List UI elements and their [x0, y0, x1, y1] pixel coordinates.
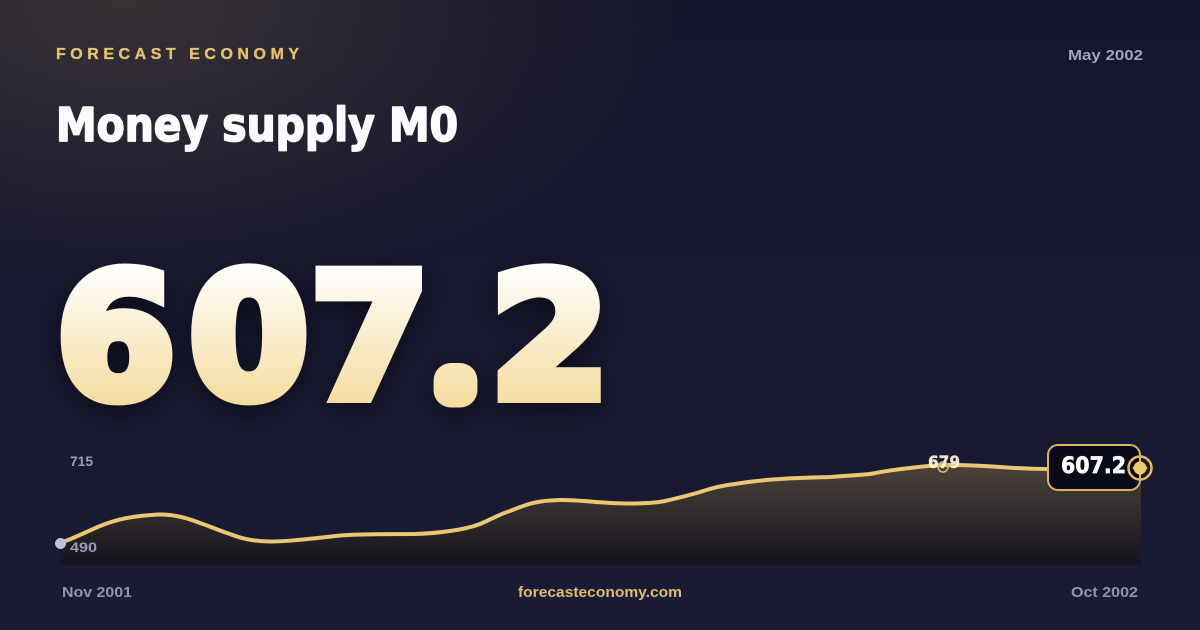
headline value — [56, 237, 610, 438]
axis max label: 715 — [70, 453, 93, 469]
title: Money supply M0 — [56, 98, 458, 152]
date label: May 2002 — [1068, 47, 1143, 64]
latest value callout: 607.2 — [1061, 454, 1126, 479]
latest value callout — [1048, 445, 1140, 490]
headline value: 2 — [490, 237, 610, 438]
website label: forecasteconomy.com — [518, 584, 682, 601]
headline value: 6 — [56, 237, 176, 438]
latest point marker — [1128, 456, 1152, 480]
end date label: Oct 2002 — [1071, 584, 1138, 601]
chart area fill — [60, 465, 1141, 565]
headline value: 7 — [310, 237, 430, 438]
start point marker — [55, 538, 66, 549]
brand label: FORECAST ECONOMY — [56, 46, 299, 63]
peak marker — [938, 462, 948, 472]
start date label: Nov 2001 — [62, 584, 132, 601]
peak value label: 679 — [928, 453, 960, 473]
headline value: 0 — [189, 237, 309, 438]
chart: money supply trend — [55, 445, 1152, 565]
axis min label: 490 — [70, 539, 97, 555]
headline value: . — [446, 344, 465, 402]
chart line — [60, 465, 1060, 543]
